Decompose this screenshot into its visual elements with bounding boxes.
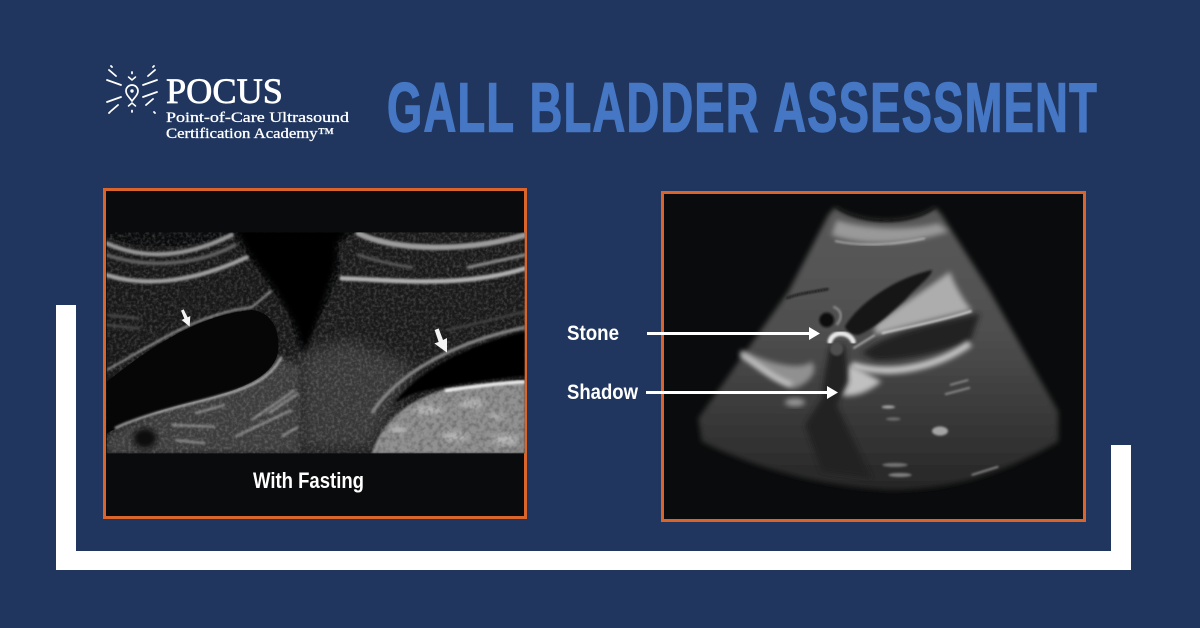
ultrasound image: gallstone with shadow [698, 207, 1058, 490]
right liver capsule [445, 382, 525, 391]
lower tissue streaks [172, 390, 298, 443]
bright band above lumen [875, 272, 972, 335]
left lumen lower wall [115, 357, 282, 428]
panel: gallstone ultrasound [567, 192, 1084, 520]
centre seam [298, 380, 303, 453]
vessel line [787, 289, 828, 298]
acoustic shadow [805, 345, 872, 478]
infographic canvas [56, 65, 1131, 570]
right tissue [300, 232, 525, 453]
panel: with fasting ultrasound [104, 190, 526, 518]
shadow blob [133, 428, 157, 448]
logo: POCUS [107, 66, 350, 142]
centre mottled tissue [300, 340, 415, 450]
logo tagline: Point-of-Care Ultrasound [166, 110, 350, 126]
white bracket frame [56, 305, 1131, 570]
arrows on image [181, 309, 190, 327]
near-field bright band [832, 220, 948, 243]
speckle [107, 232, 525, 453]
posterior enhancement [840, 365, 882, 396]
label: Shadow: Shadow [567, 381, 639, 404]
arrow: stone [647, 327, 820, 340]
wall highlights [882, 311, 972, 333]
right fascia bands [342, 233, 525, 330]
icon: radiating location pin [107, 66, 157, 113]
logo tagline: Certification Academy™ [166, 126, 334, 142]
left fascia bands [107, 235, 247, 328]
caption: with fasting: With Fasting [253, 468, 364, 493]
lower-left bright tissue [107, 357, 300, 453]
left gallbladder wall [107, 291, 272, 370]
left gallbladder lumen [107, 310, 279, 433]
right gallbladder lumen [392, 332, 525, 407]
left bright band [740, 350, 814, 388]
gallstone [830, 334, 853, 342]
liver dark texture [372, 380, 525, 453]
left tissue [107, 232, 300, 453]
logo wordmark: POCUS [166, 71, 283, 111]
liver bright region [372, 382, 525, 453]
label: Stone: Stone [567, 322, 619, 345]
right gallbladder wall [372, 327, 525, 413]
arrow: shadow [646, 386, 838, 399]
liver speckle [390, 399, 518, 445]
deep reflections [882, 405, 948, 477]
upper dark duct [845, 270, 932, 335]
sector fan [698, 208, 1058, 490]
small cyst ring [819, 313, 834, 327]
top gap [235, 227, 352, 353]
near-field dark curve [837, 207, 935, 220]
ultrasound image: fasting gallbladder [107, 227, 525, 453]
lower dark gallbladder [862, 313, 980, 360]
